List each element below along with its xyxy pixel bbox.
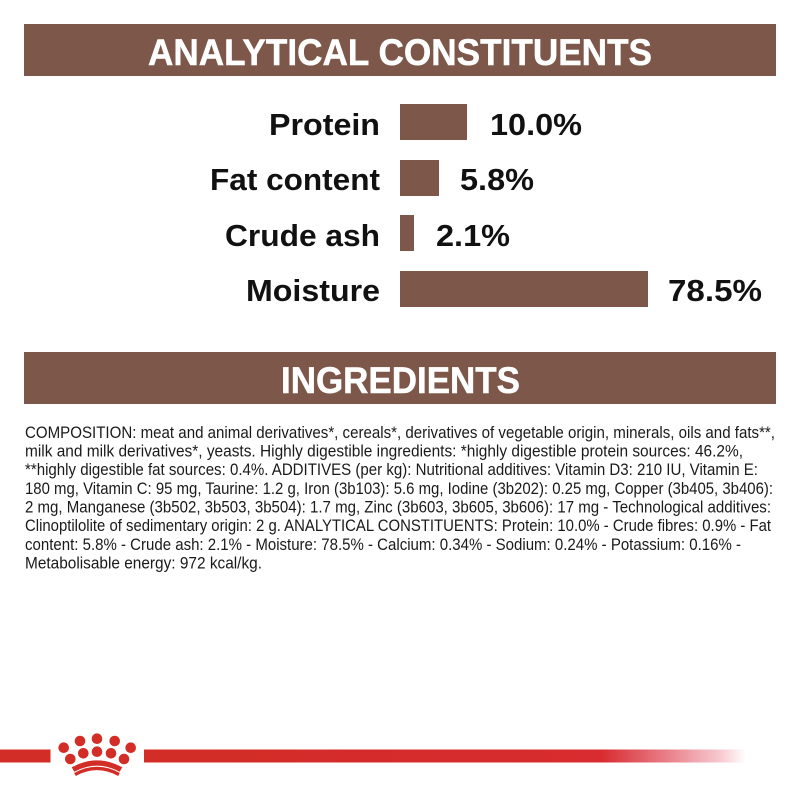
row: moisture: Moisture — [246, 273, 380, 308]
row: fat content: Fat content — [210, 162, 380, 197]
row: crude ash — [225, 215, 510, 253]
heading: analytical constituents — [24, 24, 776, 76]
text block: composition — [25, 424, 775, 572]
text block: composition: content: 5.8% - Crude ash: 2.1% - Moisture: 78.5% - Calcium: 0.34% - Sodium: 0.24% - Potassium: 0.16% - — [25, 536, 741, 554]
heading: ingredients: INGREDIENTS — [281, 360, 520, 401]
heading: ingredients — [24, 352, 776, 404]
row: protein: Protein — [269, 107, 380, 142]
text block: composition: **highly digestible fat sources: 0.4%. ADDITIVES (per kg): Nutritional additives: Vitamin D3: 210 IU, Vitamin E: — [25, 461, 758, 479]
heading: analytical constituents: ANALYTICAL CONSTITUENTS — [148, 32, 652, 73]
row: moisture: 78.5% — [668, 273, 762, 308]
row: crude ash: 2.1% — [436, 218, 510, 253]
text block: composition: milk and milk derivatives*, yeasts. Highly digestible ingredients: *highly digestible protein sources: 46.2%, — [25, 442, 743, 460]
row: fat content: 5.8% — [460, 162, 534, 197]
icon: royal crown logo — [58, 733, 136, 774]
row: moisture — [246, 271, 762, 308]
row: fat content — [210, 160, 534, 197]
row: protein: 10.0% — [490, 107, 582, 142]
bar chart: analytical constituents — [210, 104, 762, 308]
footer stripe: right fading segment — [144, 750, 746, 762]
row: crude ash: Crude ash — [225, 218, 380, 253]
footer stripe: left segment — [0, 750, 50, 762]
row: protein — [269, 104, 582, 142]
text block: composition: Metabolisable energy: 972 kcal/kg. — [25, 554, 262, 572]
